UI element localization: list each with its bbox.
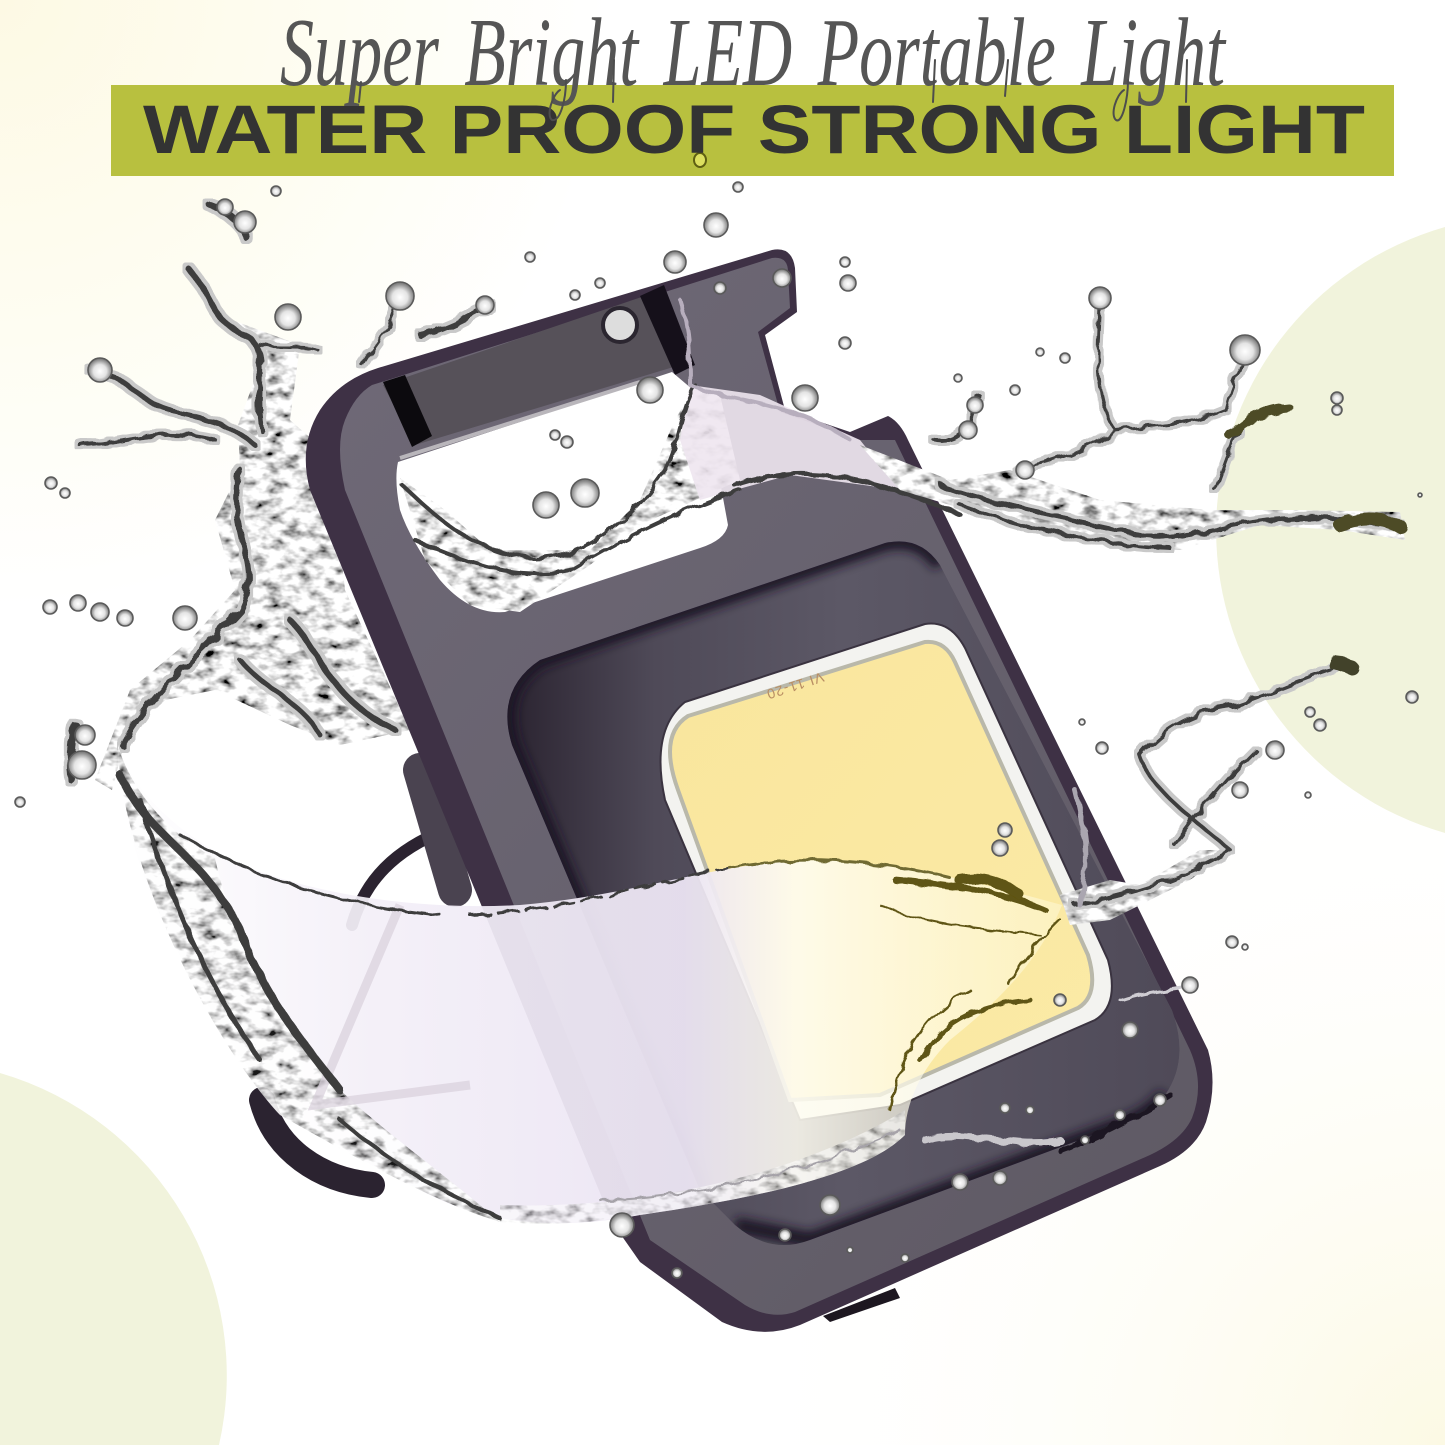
banner: [111, 85, 1394, 176]
clip black bar: [383, 375, 432, 447]
band left texture: [118, 745, 500, 1222]
banner heading: WATER PROOF STRONG LIGHT: [143, 91, 1365, 168]
bottle opener hole: [396, 372, 728, 612]
splash edge strokes: [402, 300, 960, 573]
rubber pad: [507, 541, 1180, 1245]
droplet on banner: [694, 153, 706, 167]
splash: right jet: [860, 298, 1405, 550]
splash: lower right tendrils: [925, 663, 1352, 1150]
translucent sheet over top: [680, 385, 900, 500]
water band wrapping the light: [118, 745, 1062, 1224]
lens etched code: VI 11-20: [764, 669, 826, 703]
band lower foam edge: [500, 1110, 905, 1224]
band streaks: [120, 775, 950, 1218]
splash tendrils left: [71, 205, 490, 780]
decorative circle: right: [1216, 227, 1445, 833]
golden ripples on lens: [880, 879, 1060, 1110]
jet strokes and tendrils: [935, 298, 1400, 548]
lens silver frame: [660, 624, 1112, 1120]
decorative circle: lower left: [0, 1073, 227, 1445]
water droplets: [15, 182, 1422, 1278]
carabiner clip strap: [383, 290, 690, 445]
stand ring behind light: [262, 770, 455, 1185]
lens yellow COB: [670, 642, 1092, 1100]
olive droplet highlights: [1230, 408, 1402, 528]
splash: water through opener and over clip: [400, 300, 960, 612]
pad trench and streaks: [925, 663, 1352, 1150]
splash: left water mass: [71, 205, 490, 790]
side switch: [823, 1288, 900, 1322]
screw: [603, 308, 637, 342]
front face with bottle opener: [340, 258, 1198, 1315]
clip silver edge: [400, 382, 640, 458]
script title descender strokes: [359, 60, 1187, 120]
band ghost triangle: [315, 905, 470, 1105]
body outer shell: [306, 249, 1213, 1332]
flashlight keychain: [306, 249, 1213, 1332]
